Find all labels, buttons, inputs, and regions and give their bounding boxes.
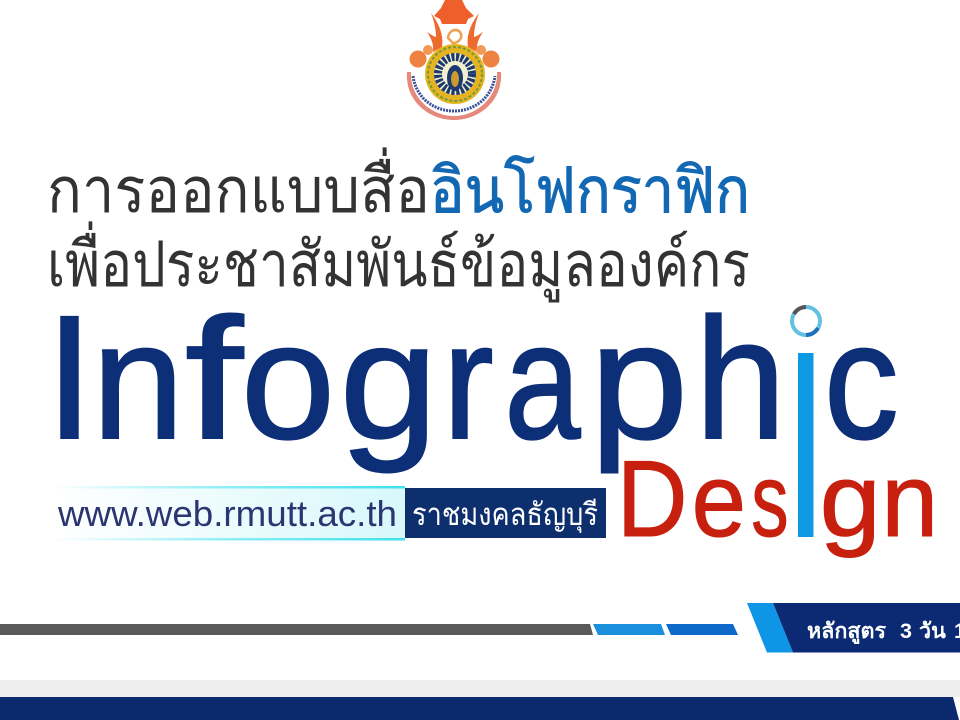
heading: Thai title line 2: เพื่อประชาสัมพันธ์ข้อมูลองค์กร	[47, 221, 750, 303]
heading: Infographic: f	[185, 283, 244, 475]
heading: Thai title line 1: การออกแบบสื่ออินโฟกราฟิก	[47, 147, 750, 226]
heading: Design: D	[617, 438, 688, 560]
Thai label text: ราชมงคลธัญบุรี	[412, 497, 598, 534]
icon: university crest	[407, 0, 501, 120]
heading: Design: e	[692, 443, 746, 559]
heading: Infographic: g	[340, 289, 438, 474]
banner text: วัน	[919, 619, 946, 643]
heading: Infographic	[45, 280, 899, 476]
heading: Infographic: o	[241, 289, 335, 474]
heading: Infographic: c	[824, 289, 899, 474]
heading: Infographic: r	[443, 289, 494, 474]
lower navy panel	[0, 697, 959, 720]
heading: Infographic: a	[504, 289, 581, 474]
divider: grey and blue segments	[0, 624, 738, 635]
heading: Infographic: I	[45, 280, 94, 476]
heading: Design	[617, 438, 938, 560]
heading: Infographic: h	[695, 283, 786, 475]
heading: Infographic: p	[590, 289, 688, 474]
heading: Design: s	[751, 443, 789, 559]
banner: course duration	[747, 603, 960, 652]
URL bar	[50, 486, 405, 540]
URL text: www.web.rmutt.ac.th	[57, 493, 397, 534]
lower strip	[0, 680, 960, 697]
label: Rajamangala box	[405, 488, 606, 538]
heading: Infographic: n	[92, 289, 184, 474]
heading: Design: n	[881, 443, 938, 559]
letter i bar	[798, 353, 814, 537]
banner text: หลักสูตร	[807, 619, 886, 645]
heading: Design: g	[820, 443, 881, 559]
banner text: 3	[900, 619, 912, 643]
icon: ring dot on the letter i	[792, 307, 820, 335]
